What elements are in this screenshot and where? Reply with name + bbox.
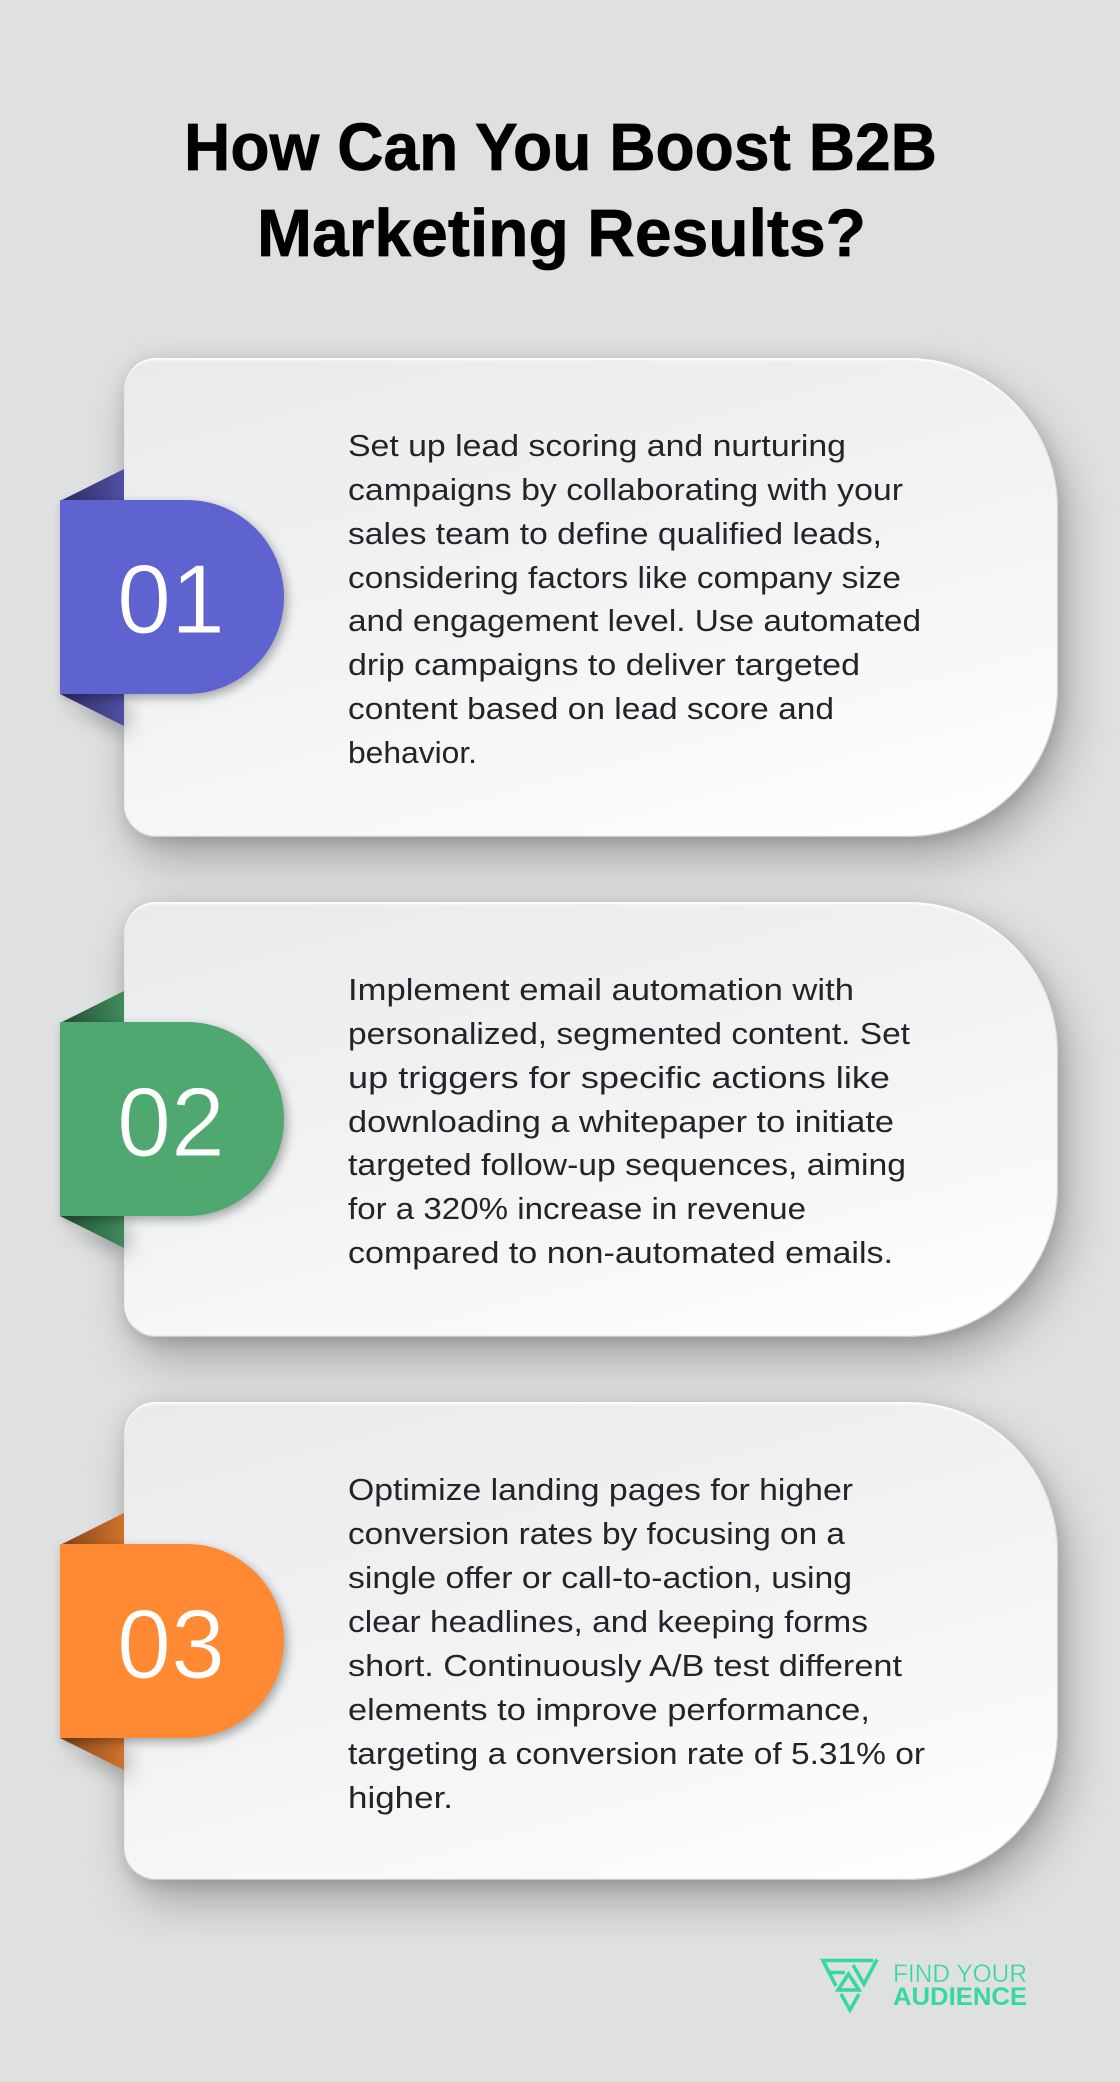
text block: targeting a conversion rate of 5.31% or [348, 1738, 925, 1771]
text block [348, 430, 921, 770]
icon: ribbon folds [60, 991, 138, 1261]
title: Marketing Results? [257, 196, 866, 271]
text block: conversion rates by focusing on a [348, 1518, 845, 1551]
card background [124, 358, 1058, 837]
number badge 01 [60, 500, 284, 694]
text block: and engagement level. Use automated [348, 605, 921, 638]
text block: campaigns by collaborating with your [348, 474, 903, 507]
text block: for a 320% increase in revenue [348, 1193, 806, 1226]
text block: clear headlines, and keeping forms [348, 1606, 868, 1639]
text block: Optimize landing pages for higher [348, 1474, 853, 1507]
text block: Set up lead scoring and nurturing [348, 430, 846, 463]
icon: triangle mark [823, 1960, 877, 2010]
card background [124, 1402, 1058, 1880]
text block: sales team to define qualified leads, [348, 518, 882, 551]
number badge 03 [60, 1544, 284, 1738]
logo wordmark: FIND YOUR [893, 1960, 1027, 1988]
number badge 02: 02 [117, 1067, 225, 1177]
logo wordmark [893, 1960, 1027, 2011]
text block: personalized, segmented content. Set [348, 1018, 911, 1051]
text block: drip campaigns to deliver targeted [348, 649, 860, 682]
panel: step 3 [57, 1394, 1092, 1926]
text block: short. Continuously A/B test different [348, 1650, 903, 1683]
text block: content based on lead score and [348, 693, 834, 726]
text block: up triggers for specific actions like [348, 1062, 890, 1095]
title [184, 110, 937, 271]
logo wordmark: AUDIENCE [893, 1983, 1027, 2011]
text block: targeted follow-up sequences, aiming [348, 1149, 906, 1182]
text block: behavior. [348, 737, 477, 770]
icon: ribbon folds [60, 1513, 138, 1783]
text block [348, 974, 911, 1270]
number badge 01: 01 [117, 544, 225, 654]
number badge 02 [60, 1022, 284, 1216]
text block [348, 1474, 925, 1815]
icon: ribbon folds [60, 469, 138, 739]
text block: Implement email automation with [348, 974, 854, 1007]
text block: elements to improve performance, [348, 1694, 870, 1727]
panel: step 2 [57, 894, 1092, 1382]
panel: step 1 [57, 350, 1092, 882]
text block: considering factors like company size [348, 562, 901, 595]
number badge 03: 03 [117, 1589, 225, 1699]
logo: Find Your Audience [820, 1958, 1027, 2014]
title: How Can You Boost B2B [184, 110, 937, 185]
text block: higher. [348, 1782, 453, 1815]
card background [124, 902, 1058, 1337]
text block: compared to non-automated emails. [348, 1237, 893, 1270]
text block: downloading a whitepaper to initiate [348, 1106, 894, 1139]
text block: single offer or call-to-action, using [348, 1562, 852, 1595]
